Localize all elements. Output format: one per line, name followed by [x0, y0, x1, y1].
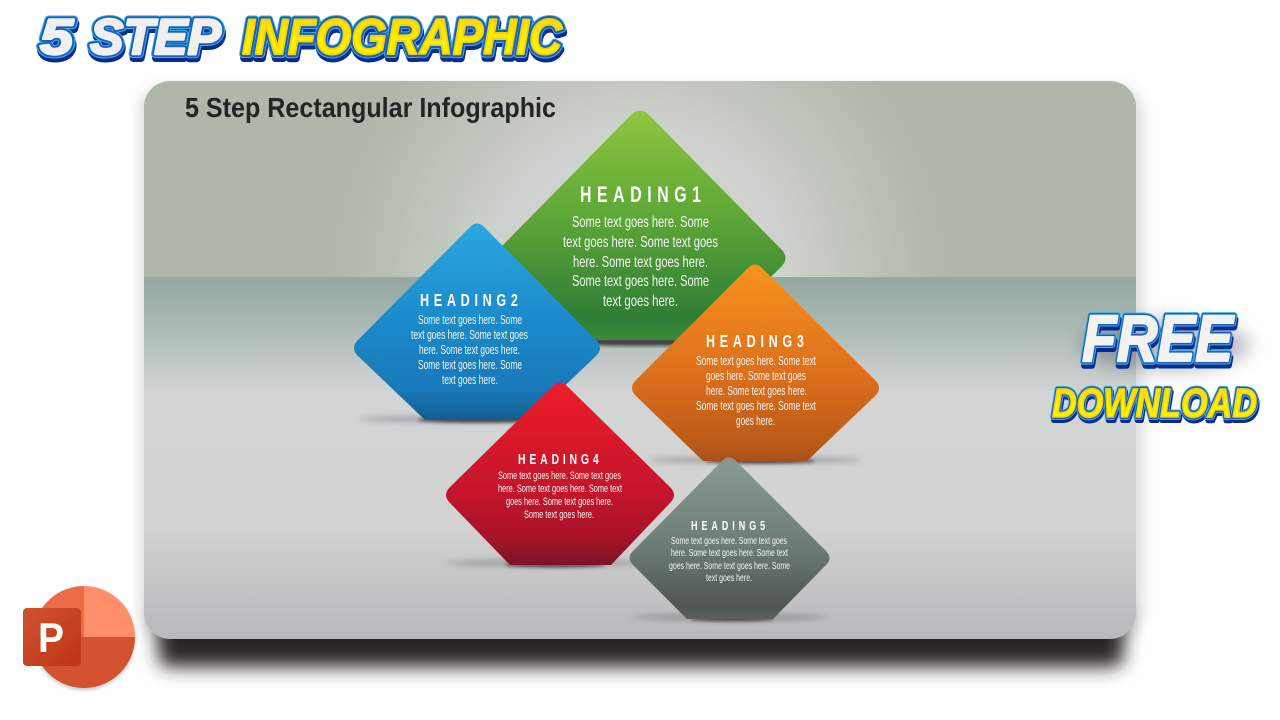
- text block 4: Some text goes here.: [524, 509, 594, 521]
- text block 4: here. Some text goes here. Some text: [498, 483, 622, 495]
- heading 5: HEADING5: [691, 520, 765, 533]
- step 1: green diamond: [494, 110, 786, 346]
- text block 5: [669, 536, 790, 584]
- step 2: blue diamond: [354, 224, 600, 422]
- banner word: 5: 5: [40, 9, 74, 65]
- text block 5: goes here. Some text goes here. Some: [669, 561, 790, 572]
- panel: slide background: [144, 81, 1136, 639]
- step 3: orange diamond: [632, 264, 879, 464]
- text block 2: text goes here. Some text goes: [411, 328, 528, 342]
- text block 5: here. Some text goes here. Some text: [671, 548, 788, 559]
- text block 3: Some text goes here. Some text: [696, 399, 816, 413]
- text block 1: Some text goes here. Some: [572, 273, 709, 290]
- badge word: FREE: FREE: [1082, 301, 1235, 375]
- badge word: FREE: FREE: [1082, 301, 1235, 375]
- text block 2: Some text goes here. Some: [418, 358, 522, 372]
- banner word: 5: 5: [41, 13, 75, 69]
- text block 2: [411, 313, 528, 387]
- text block 2: text goes here.: [442, 373, 498, 387]
- banner word: 5: 5: [40, 9, 74, 65]
- text block 4: Some text goes here. Some text goes: [498, 470, 621, 482]
- text block 2: here. Some text goes here.: [419, 343, 520, 357]
- heading 1: HEADING1: [580, 184, 701, 208]
- icon: PowerPoint logo: [23, 586, 135, 690]
- banner word: INFOGRAPHIC: INFOGRAPHIC: [243, 13, 564, 69]
- text block 1: text goes here. Some text goes: [563, 234, 718, 251]
- text block 1: Some text goes here. Some: [572, 214, 709, 231]
- panel drop shadow: [139, 85, 1143, 667]
- banner word: INFOGRAPHIC: INFOGRAPHIC: [242, 9, 563, 65]
- text block 3: goes here.: [736, 414, 775, 428]
- step 4: red diamond: [445, 382, 674, 568]
- badge shadow: [1080, 319, 1250, 371]
- banner word: STEP: STEP: [90, 9, 222, 65]
- banner word: 5: 5: [40, 9, 74, 65]
- text block 3: [696, 354, 816, 428]
- heading 4: HEADING4: [518, 451, 599, 467]
- banner word: STEP: STEP: [90, 9, 222, 65]
- text block 1: text goes here.: [603, 293, 678, 310]
- badge word: FREE: FREE: [1083, 305, 1236, 379]
- banner title: 5 STEP INFOGRAPHIC: [40, 9, 564, 69]
- text block 5: text goes here.: [706, 573, 752, 584]
- heading 3: HEADING3: [706, 332, 804, 352]
- icon: PowerPoint logo: P: [38, 614, 64, 661]
- banner word: INFOGRAPHIC: INFOGRAPHIC: [242, 9, 563, 65]
- heading 2: HEADING2: [420, 291, 518, 311]
- slide title: 5 Step Rectangular Infographic: [185, 92, 556, 123]
- text block 2: Some text goes here. Some: [418, 313, 522, 327]
- text block 4: goes here. Some text goes here.: [506, 496, 613, 508]
- text block 1: [563, 214, 718, 310]
- text block 3: Some text goes here. Some text: [696, 354, 816, 368]
- banner word: INFOGRAPHIC: INFOGRAPHIC: [242, 9, 563, 65]
- text block 3: goes here. Some text goes: [706, 369, 806, 383]
- text block 1: here. Some text goes here.: [573, 254, 708, 271]
- step 5: grey diamond: [630, 458, 830, 622]
- banner word: STEP: STEP: [90, 9, 222, 65]
- badge word: FREE: FREE: [1082, 301, 1235, 375]
- text block 5: Some text goes here. Some text goes: [671, 536, 787, 547]
- text block 3: here. Some text goes here.: [706, 384, 807, 398]
- badge: FREE DOWNLOAD: [1052, 301, 1258, 429]
- text block 4: [498, 470, 622, 521]
- banner word: STEP: STEP: [91, 13, 223, 69]
